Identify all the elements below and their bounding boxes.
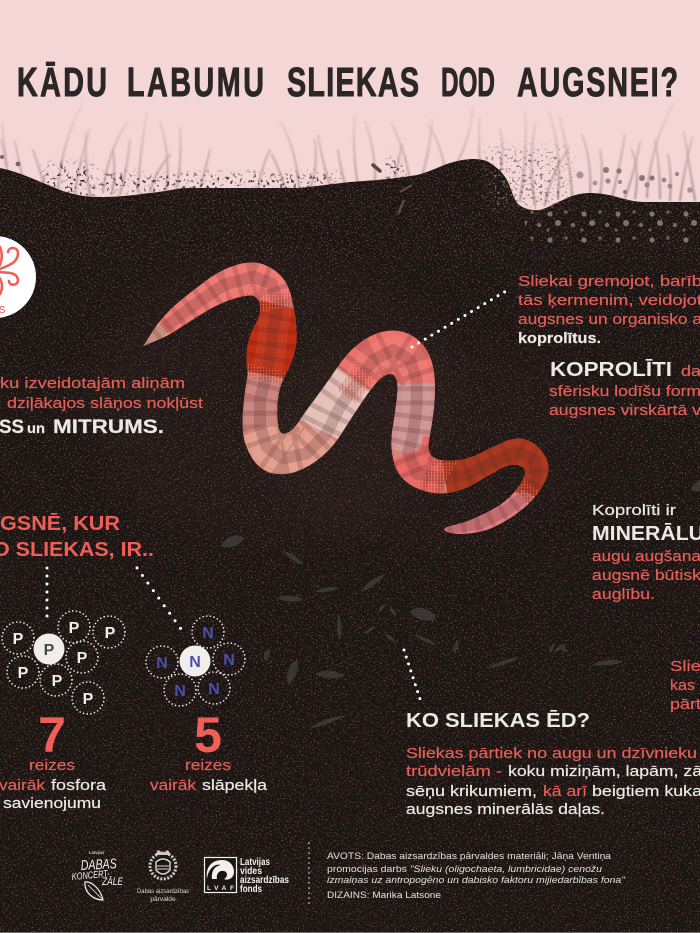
text block: right cropped note [670, 658, 700, 713]
logo: Dabas aizsardzības pārvalde [137, 850, 190, 903]
text block: what worms eat: augsnes minerālās daļas. [406, 801, 605, 818]
worm descending section [408, 383, 417, 453]
text block: digestion and coprolites: tās ķermenim, veidojot [518, 292, 700, 309]
text block: KOPROLĪTI: augsnes virskārtā v [549, 402, 700, 419]
stat: 7 times more phosphorus [0, 707, 107, 812]
phosphorus molecule cluster: P [13, 631, 24, 648]
text block: minerals [592, 502, 700, 603]
worm red clitellum band [267, 305, 278, 375]
grass on the horizon [1, 103, 695, 205]
logo: Dabas koncertzāle: KONCERT- [71, 869, 111, 883]
logo: Dabas koncertzāle: DABAS [80, 855, 118, 873]
text block: burrows bring air and moisture: MITRUMS. [53, 417, 164, 438]
nitrogen molecule cluster: N [156, 655, 168, 672]
dotted leader to phosphorus [46, 568, 48, 617]
heading: soil where worms live [0, 513, 154, 561]
logo: LVAF: fonds [240, 884, 262, 895]
logo: Dabas koncertzāle: ZĀLE [101, 876, 124, 888]
text block: digestion and coprolites [518, 273, 700, 347]
text block: digestion and coprolites: Sliekai gremojot, barīb [518, 273, 700, 290]
logo: Dabas aizsardzības pārvalde: pārvalde [150, 896, 176, 903]
stat: 5 times more nitrogen: 5 [194, 707, 222, 763]
dotted leader to food heading [404, 650, 420, 699]
text block: what worms eat: kā arī [543, 783, 588, 800]
dotted leader: worm to digestion text [412, 288, 511, 347]
text block: right cropped note: Slie [670, 658, 700, 675]
text block: what worms eat: Sliekas pārtiek no augu un dzīvnieku [406, 745, 697, 762]
sources and credits: DIZAINS: Marika Latsone [327, 890, 441, 901]
phosphorus molecule cluster: P [83, 691, 94, 708]
worm base body colour [144, 262, 549, 534]
logo: LVAF: aizsardzības [240, 875, 289, 886]
logo: Dabas koncertzāle [71, 850, 124, 900]
text block: digestion and coprolites: koprolītus. [518, 330, 601, 347]
worm lower loop [260, 372, 267, 427]
text block: burrows bring air and moisture: un [27, 420, 45, 436]
stat: 5 times more nitrogen: vairāk [150, 777, 197, 794]
text block: what worms eat: KO SLIEKAS ĒD? [406, 710, 590, 732]
soil edge grunge and flying crumbs [0, 150, 693, 210]
text block: KOPROLĪTI: da [681, 363, 700, 380]
worm pale section [327, 382, 358, 433]
text block: what worms eat [406, 710, 700, 818]
title: SLIEKAS [287, 60, 419, 105]
nitrogen molecule cluster: N [174, 683, 186, 700]
text block: minerals: MINERĀLU [592, 523, 700, 545]
decorative leaves and organic litter [220, 476, 700, 730]
worm transverse segment bands [133, 277, 537, 530]
phosphorus molecule cluster: P [77, 650, 88, 667]
logo: LVAF: Latvijas [240, 857, 270, 868]
text block: minerals: augu augšana [592, 548, 700, 565]
nitrogen molecule cluster: N [208, 681, 220, 698]
text block: what worms eat: beigtiem kuka [592, 783, 700, 800]
worm tail section [437, 493, 528, 530]
worm upper hump [358, 350, 418, 387]
stat: 7 times more phosphorus: savienojumu [3, 795, 101, 812]
logo: white circle with swirl [0, 236, 36, 318]
phosphorus molecule cluster: P [52, 673, 63, 690]
logo: LVAF: LVAF [207, 885, 234, 892]
phosphorus molecule cluster: P [44, 642, 55, 659]
text block: what worms eat: koku miziņām, lapām, zā [508, 763, 700, 780]
stat: 7 times more phosphorus: vairāk [0, 777, 46, 794]
logo: Dabas aizsardzības pārvalde: Dabas aizsardzības [137, 888, 190, 895]
nitrogen molecule cluster: N [189, 654, 201, 671]
worm dark red band [445, 452, 537, 493]
logo: LVAF [204, 857, 289, 895]
text block: KOPROLĪTI [549, 359, 700, 419]
text block: KOPROLĪTI: KOPROLĪTI [550, 359, 672, 381]
text block: what worms eat: sēņu krikumiem, [406, 783, 537, 800]
title: LABUMU [127, 60, 264, 105]
text block: digestion and coprolites: augsnes un organisko a [518, 311, 700, 328]
earthworm illustration [143, 262, 549, 534]
text block: minerals: augsnē būtisk [592, 567, 700, 584]
title: KĀDU [17, 60, 107, 105]
sources and credits [327, 851, 626, 901]
text block: burrows bring air and moisture: dziļākajos slāņos nokļūst [7, 395, 204, 412]
sources and credits: izmaiņas uz antropogēno un dabisko faktoru mijiedarbības fona" [327, 875, 626, 886]
nitrogen molecule cluster: N [202, 625, 214, 642]
text block: right cropped note: kas [670, 677, 695, 694]
dotted leader to nitrogen [137, 568, 181, 629]
text block: what worms eat: trūdvielām - [406, 763, 502, 780]
worm stippled transitions [277, 293, 279, 308]
text block: burrows bring air and moisture: ku izveidotajām aliņām [0, 375, 185, 392]
phosphorus molecule cluster: P [105, 625, 116, 642]
title: AUGSNEI? [517, 60, 678, 105]
phosphorus molecule cluster: P [18, 665, 29, 682]
stat: 7 times more phosphorus: 7 [38, 707, 66, 763]
text block: KOPROLĪTI: sfērisku lodīšu form [549, 383, 700, 400]
phosphorus molecule cluster: P [69, 620, 80, 637]
worm front section [133, 277, 278, 353]
nitrogen molecule cluster [146, 616, 245, 706]
stat: 5 times more nitrogen: reizes [185, 757, 231, 774]
sources and credits: promocijas darbs "Slieku (oligochaeta, lumbricidae) cenožu [327, 864, 603, 875]
stat: 7 times more phosphorus: reizes [29, 757, 75, 774]
heading: soil where worms live: GSNĒ, KUR [0, 513, 121, 535]
nitrogen molecule cluster: N [223, 652, 235, 669]
title [17, 60, 678, 105]
phosphorus molecule cluster [2, 611, 125, 714]
stat: 7 times more phosphorus: fosfora [51, 777, 107, 794]
text block: minerals: auglību. [592, 586, 655, 603]
text block: minerals: Koprolīti ir [592, 502, 676, 519]
text block: burrows bring air and moisture [0, 375, 204, 438]
logo: LVAF: vides [240, 866, 262, 877]
text block: right cropped note: pārt [670, 696, 700, 713]
logo: Dabas koncertzāle: Latvijas [89, 850, 105, 855]
stat: 5 times more nitrogen [150, 707, 268, 794]
sources and credits: AVOTS: Dabas aizsardzības pārvaldes materiāli; Jāņa Ventiņa [327, 851, 612, 862]
title: DOD [441, 60, 495, 105]
stat: 5 times more nitrogen: slāpekļa [202, 777, 268, 794]
